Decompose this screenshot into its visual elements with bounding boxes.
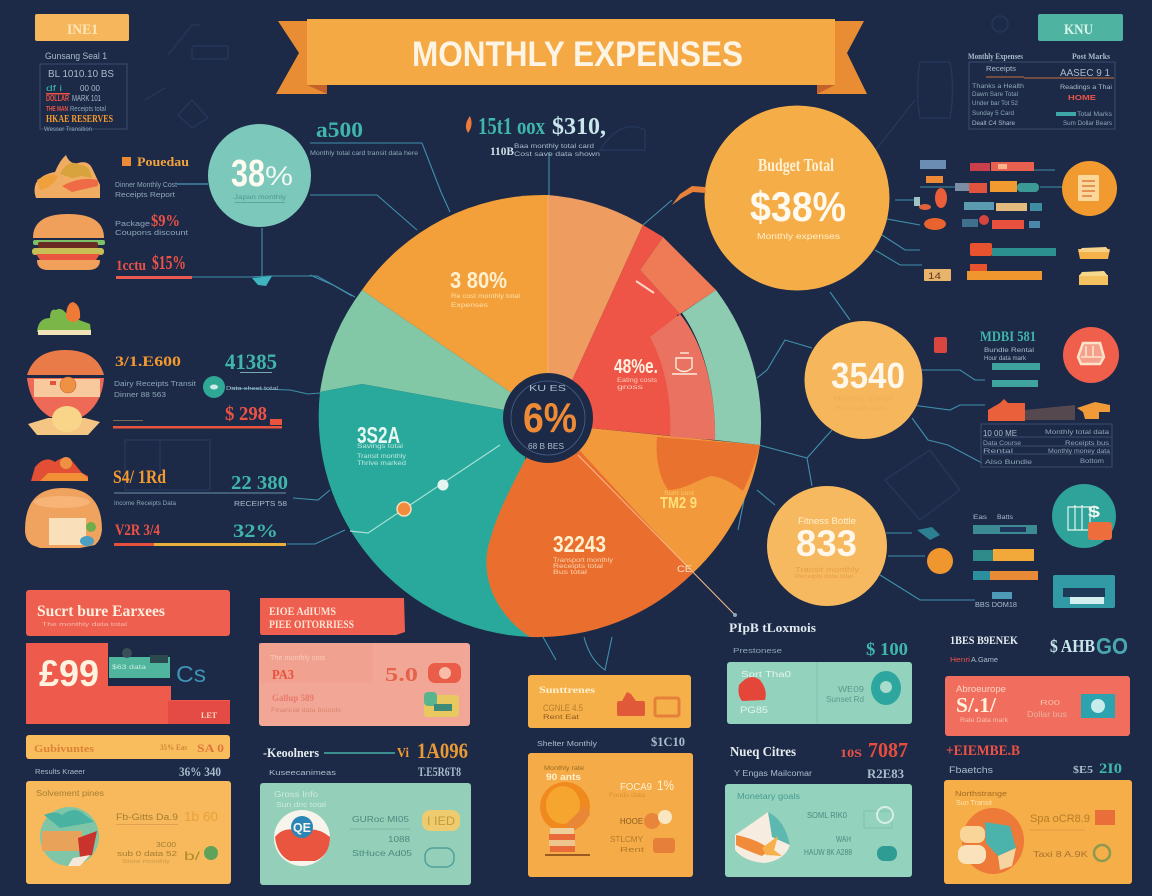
heading: top right row — [950, 633, 1128, 664]
panel: yellow card center: Rent Eat — [543, 715, 579, 721]
top right table: Readings a Thai — [1060, 85, 1112, 91]
slice label: red — [614, 356, 658, 391]
panel: yellow card center — [528, 675, 691, 728]
pie slice: salmon arc — [650, 314, 715, 440]
teal percentage circle: % — [265, 161, 293, 191]
right panel: teal circle cluster — [917, 484, 1116, 609]
slice label: orange: Re cost monthly total — [451, 294, 520, 300]
food row 3 text — [113, 467, 288, 546]
slice label: orange right: TM2 9 — [660, 495, 697, 512]
yellow number circle: Monthly transit — [833, 396, 893, 403]
row heading: Keoolners — [263, 738, 468, 763]
slice label: red: Eating costs — [617, 378, 657, 384]
center hub — [503, 373, 593, 463]
food row 3 text: V2R 3/4 — [115, 522, 160, 539]
panel: orange card center: 90 ants — [546, 772, 581, 782]
food row 2 text: Dinner 88 563 — [114, 392, 166, 399]
yellow number circle — [804, 321, 922, 439]
big orange percentage circle: Monthly expenses — [757, 232, 840, 241]
heading: nueq cities: 7087 — [868, 738, 908, 762]
heading: nueq cities: 10S — [840, 746, 862, 760]
right panel: teal circle cluster: Batts — [997, 515, 1013, 521]
icon: burger — [32, 214, 105, 270]
panel: green card left: 1088 — [388, 835, 411, 844]
heading: nueq cities — [730, 738, 908, 781]
panel: orange card right: Sun Transit — [956, 800, 992, 807]
heading: lower right row: Fbaetchs — [949, 765, 994, 775]
food row 2 text: 41385 — [225, 349, 277, 374]
heading: pipe toxmois — [729, 620, 908, 659]
icon: mixed food plate — [958, 808, 1024, 874]
panel: yellow card center: Sunttrenes — [539, 685, 596, 695]
panel: salmon card: The monthly cost — [270, 655, 325, 662]
pie slice: light orange — [570, 428, 760, 573]
panel: salmon card: PA3 — [272, 668, 294, 683]
top center callout: Cost save data shown — [514, 152, 600, 158]
row label center: Shelter Monthly — [537, 741, 598, 748]
icon: salad — [37, 302, 91, 335]
right panel: orange bags and table: Data Course — [983, 441, 1022, 447]
top right table: Sunday 5 Card — [972, 111, 1014, 117]
pie chart: CE — [677, 564, 692, 574]
food row 1 text: 1cctu — [116, 258, 146, 274]
panel: orange card center: Rent — [620, 847, 644, 854]
pie slice: teal — [319, 384, 548, 637]
panel: orange card left: Fb-Gitts Da.9 — [116, 812, 178, 822]
heading: top right row: 1BES B9ENEK — [950, 633, 1019, 647]
top left table — [40, 51, 127, 133]
row label center left: T.E5R6T8 — [418, 764, 461, 779]
slice label: teal: Transit monthly — [357, 454, 406, 460]
slice label: red: 48%e. — [614, 356, 658, 378]
panel: orange card left: Solvement pines — [36, 789, 104, 798]
panel: green card lower: HAUW 8K A288 — [804, 848, 852, 857]
panel: salmon card: Financial data bounds — [271, 708, 341, 714]
panel: green card left: Gross Info — [274, 790, 319, 799]
panel: green card upper: Sprt Tha0 — [741, 670, 792, 679]
top left table: 00 00 — [80, 84, 101, 93]
top right table: Monthly Expenses — [968, 52, 1023, 61]
top left table: HKAE RESERVES — [46, 114, 113, 125]
panel: orange card center: HOOE A — [620, 817, 651, 826]
top left table: Wesser Transition — [44, 127, 92, 133]
slice label: teal — [357, 422, 406, 467]
food row 1 text: Receipts Report — [115, 192, 175, 199]
top left tag: INE1 — [67, 22, 98, 38]
food row 1 text — [115, 154, 208, 279]
slice label: teal: Savings total — [357, 444, 403, 450]
slice label: dark orange: Transport monthly — [553, 558, 613, 564]
row label center — [537, 734, 685, 749]
top right table: Under bar Tot 52 — [972, 101, 1019, 107]
slice label: teal: 3S2A — [357, 422, 400, 448]
panel: orange card left: b/ — [184, 849, 201, 863]
slice label: dark orange — [553, 531, 613, 576]
top left tag — [35, 14, 129, 41]
big orange percentage circle — [672, 106, 890, 290]
row heading: Keoolners: -Keoolners — [263, 745, 319, 760]
top right tag: KNU — [1064, 22, 1093, 38]
food row 2 text: $ 298 — [225, 403, 267, 425]
food row 3 text: S4/ 1Rd — [113, 467, 166, 488]
food row 3 text: 32% — [233, 521, 278, 542]
center hub: KU ES — [529, 384, 566, 393]
panel: red header left: The monthly data total — [42, 622, 127, 628]
slice label: teal: Thrive marked — [357, 461, 406, 467]
top left table: Receipts total — [70, 106, 106, 113]
teal amount label: a500 — [316, 117, 363, 142]
food row 2 text — [113, 349, 282, 428]
row label left: Results Kraeer — [35, 769, 86, 776]
row label center: $1C10 — [651, 734, 685, 749]
panel: yellow card center: CGNLE 4.5 — [543, 703, 583, 713]
panel: salmon header — [260, 598, 405, 635]
row heading: Keoolners: 1A096 — [417, 738, 468, 763]
right panel: orange bags and table: Also Bundle — [985, 460, 1033, 466]
panel: orange card center: Foods data — [609, 793, 646, 799]
panel: green card lower: Monetary goals — [737, 792, 800, 801]
food row 2 text: Data sheet total — [226, 386, 278, 392]
slice label: orange right: Sum cost — [664, 491, 694, 497]
pie slice: dark orange — [486, 445, 693, 637]
right panel: orange bags and table: Receipts bus — [1065, 441, 1109, 447]
right panel: orange bags and table: Monthly money data — [1048, 449, 1111, 455]
heading: lower right row: +EIEMBE.B — [946, 743, 1020, 759]
pie slice: right green — [682, 290, 761, 445]
slice label: dark orange: Bus total — [553, 570, 587, 576]
pie slice: salmon upper — [640, 237, 716, 314]
panel: red header left — [26, 590, 230, 636]
food row 3 text: Income Receipts Data — [114, 501, 177, 507]
right panel: teal circle cluster: Eas — [973, 515, 987, 521]
icon: cup — [672, 353, 697, 374]
panel: orange card right — [944, 780, 1132, 884]
heading: nueq cities: Y Engas Mailcomar — [734, 769, 812, 778]
top left table: DOLLAR — [46, 94, 69, 103]
panel: orange card left: sub 0 data 52 — [117, 851, 177, 858]
panel: orange card center: FOCA9 — [620, 782, 652, 793]
pie accent: deep orange — [657, 437, 760, 491]
top left table: THE MAN — [46, 106, 68, 113]
right panel: orange bags and table: Monthly total data — [1045, 430, 1110, 436]
panel: yellow bar: SA 0 — [197, 741, 224, 755]
heading: nueq cities: Nueq Citres — [730, 745, 797, 760]
yellow number circle lower: Transit monthly — [795, 567, 860, 574]
slice label: orange right — [660, 491, 697, 512]
panel: green card left: StHuce Ad05 — [352, 849, 413, 858]
panel: salmon card: 5.0 — [385, 664, 418, 686]
right panel: teal circle cluster: BBS DOM18 — [975, 602, 1017, 609]
teal amount label — [310, 117, 419, 157]
title banner — [276, 19, 867, 94]
icon: chips food — [34, 155, 100, 198]
right bars group upper: 14 — [928, 271, 941, 281]
panel: red stepped block: LET — [201, 711, 218, 720]
panel: salmon card: Gallup 589 — [272, 693, 314, 703]
panel: red card right: S/.1/ — [956, 693, 997, 717]
top center callout: Baa monthly total card — [514, 144, 594, 150]
panel: red stepped block: £99 — [39, 653, 99, 694]
right panel: MDBI block: Bundle Rental — [984, 348, 1034, 354]
food row 2 text: 3/1.E600 — [115, 354, 181, 370]
top right table: Thanks a Health — [972, 84, 1024, 90]
top left table: Gunsang Seal 1 — [45, 51, 107, 61]
panel: yellow bar — [26, 735, 230, 759]
panel: salmon header: EIOE AdIUMS — [269, 604, 336, 618]
top center callout: 15t1 oox — [478, 114, 545, 140]
top right table: HOME — [1068, 95, 1096, 102]
heading: lower right row: $E5 — [1073, 764, 1094, 776]
slice label: orange — [450, 267, 520, 309]
icon: red round food: QE — [293, 820, 311, 835]
panel: green card lower — [725, 784, 912, 877]
panel: orange card right: Taxi 8 A.9K — [1033, 850, 1089, 859]
panel: orange card left: Store monthly — [122, 859, 171, 865]
panel: green card upper: WE09 — [838, 685, 865, 694]
panel: red card right: Dollar bus — [1027, 710, 1067, 719]
panel: green card left: GURoc MI05 — [352, 815, 410, 824]
green card — [109, 648, 170, 678]
top right tag — [1038, 14, 1123, 41]
panel: orange card center: 1% — [657, 777, 674, 793]
heading: pipe toxmois: PIpB tLoxmois — [729, 620, 816, 635]
slice label: orange: Expenses — [451, 303, 488, 309]
teal node — [252, 276, 272, 286]
yellow number circle lower: Fitness Bottle — [798, 516, 856, 526]
panel: orange card center — [528, 753, 693, 877]
food row 2 text: Dairy Receipts Transit — [114, 381, 196, 388]
panel: orange card left — [26, 781, 231, 884]
top left table: df i — [46, 84, 62, 93]
panel: red card right: Rate Data mark — [960, 718, 1009, 724]
heading: top right row: A.Game — [971, 657, 998, 664]
panel: salmon card — [259, 643, 470, 726]
panel: green card left — [260, 783, 471, 885]
center hub: 68 B BES — [528, 442, 564, 451]
big orange percentage circle: $38% — [750, 183, 846, 230]
connector lines — [192, 143, 1062, 670]
right panel: icon orange document — [1062, 161, 1117, 216]
pie slice: red — [548, 225, 682, 437]
panel: yellow bar: 35% Eas — [160, 743, 187, 752]
green card: $63 data — [112, 665, 147, 671]
icon: stacked coins — [540, 782, 590, 855]
row label left: 36% 340 — [179, 764, 221, 779]
teal amount label: Monthly total card transit data here — [310, 151, 419, 157]
panel: red header left: Sucrt bure Earxees — [37, 603, 165, 620]
icon: orange dome — [25, 488, 102, 548]
big orange percentage circle: Budget Total — [758, 155, 834, 175]
heading: pipe toxmois: Prestonese — [733, 648, 782, 655]
panel: green card left: I IED — [427, 814, 455, 828]
right panel: teal circle cluster: $ — [1088, 504, 1100, 521]
yellow number circle: 3540 — [831, 355, 905, 396]
panel: orange card right: Spa oCR8.9 — [1030, 813, 1090, 825]
right panel: orange bags and table: Bottom — [1080, 459, 1104, 465]
top right table: Post Marks — [1072, 52, 1110, 61]
right panel: MDBI block — [934, 327, 1119, 387]
heading: nueq cities: R2E83 — [867, 766, 904, 781]
right bars group upper — [914, 160, 1110, 285]
heading: top right row: $ AHB — [1050, 636, 1095, 656]
right panel: MDBI block: Hour data mark — [984, 356, 1027, 362]
center hub: 6% — [523, 394, 577, 441]
teal percentage circle: Japan monthly — [234, 195, 286, 201]
teal percentage circle: 38 — [231, 153, 265, 195]
top right table: Receipts — [986, 66, 1017, 73]
heading: lower right row — [946, 743, 1122, 777]
top left table: BL 1010.10 BS — [48, 69, 114, 80]
food row 3 text: 22 380 — [231, 472, 288, 494]
right panel: MDBI block: MDBI 581 — [980, 329, 1036, 345]
pie slice: peach — [548, 195, 643, 418]
slice label: dark orange: 32243 — [553, 531, 606, 557]
right panel: orange bags and table: 10 00 ME — [983, 429, 1017, 438]
yellow number circle lower: Receipts data total — [795, 574, 853, 580]
yellow number circle: Receipts data — [835, 406, 888, 412]
panel: salmon header: PIEE OITORRIESS — [269, 617, 354, 631]
panel: green card upper: Sunset Rd — [826, 695, 864, 704]
panel: green card lower: WAH — [836, 835, 851, 844]
teal percentage circle — [208, 124, 311, 227]
panel: green card upper: PG85 — [740, 705, 768, 715]
heading: lower right row: 2I0 — [1099, 761, 1122, 777]
food row 1 text: Coupons discount — [115, 230, 188, 237]
yellow number circle lower — [767, 486, 887, 606]
row label center left: Kuseecanimeas — [269, 770, 337, 777]
food row 1 text: Pouedau — [137, 154, 189, 169]
icon: wrapped food — [735, 812, 790, 863]
panel: red stepped block: Cs — [176, 661, 206, 687]
panel: orange card center: Monthly rate — [544, 766, 585, 772]
right panel: orange bags and table — [981, 399, 1112, 467]
icon: red round food — [274, 810, 330, 866]
panel: green card upper — [727, 662, 912, 724]
food row 1 text: Package — [115, 221, 150, 228]
pie slice: light green — [320, 290, 548, 418]
panel: red stepped block — [26, 643, 230, 724]
heading: top right row: Henri — [950, 657, 971, 664]
panel: orange card center: STLCMY — [610, 835, 644, 844]
right panel: orange bags and table: Rental — [983, 449, 1013, 455]
panel: orange card left: 1b 60 — [184, 809, 218, 824]
food row 1 text: $9% — [151, 211, 180, 230]
panel: red card right: Abroeurope — [956, 684, 1006, 694]
heading: pipe toxmois: $ 100 — [866, 639, 908, 659]
top right table: Sum Dollar Bears — [1063, 121, 1112, 127]
yellow number circle lower: 833 — [796, 523, 857, 564]
heading: top right row: GO — [1096, 633, 1128, 659]
top center callout: $310, — [552, 114, 606, 140]
top left table: MARK 101 — [72, 94, 101, 103]
row label center left — [269, 764, 461, 779]
icon: red mound — [31, 457, 88, 481]
top center callout: 110B — [490, 144, 514, 158]
top right table: Total Marks — [1077, 112, 1112, 118]
food row 3 text: RECEIPTS 58 — [234, 501, 287, 508]
slice label: dark orange: Receipts total — [553, 564, 603, 570]
slice label: red: gross — [617, 385, 643, 391]
panel: red card right — [945, 676, 1130, 736]
panel: green card lower: SOML RIK0 — [807, 811, 848, 820]
icon: bowl — [27, 350, 104, 435]
row label left — [35, 764, 221, 779]
icon: round food — [40, 807, 99, 866]
food row 1 text: Dinner Monthly Cost — [115, 182, 177, 189]
top right table: AASEC 9 1 — [1060, 68, 1110, 79]
food row 1 text: $15% — [152, 252, 186, 274]
top right table — [968, 52, 1115, 129]
panel: yellow bar: Gubivuntes — [34, 743, 95, 755]
panel: green card left: Sun dnc total — [276, 802, 327, 809]
top right table: Dealt C4 Share — [972, 121, 1016, 127]
pie chart — [319, 195, 761, 637]
panel: orange card right: Northstrange — [955, 791, 1007, 798]
top center callout — [466, 114, 606, 158]
panel: red card right: R00 — [1040, 700, 1060, 707]
slice label: orange: 3 80% — [450, 267, 507, 293]
row heading: Keoolners: Vi — [397, 746, 409, 761]
title banner: MONTHLY EXPENSES — [412, 35, 743, 74]
panel: orange card left: 3C00 — [156, 842, 176, 849]
pie slice: orange — [362, 195, 548, 418]
top right table: Dawn Sare Total — [972, 92, 1018, 98]
